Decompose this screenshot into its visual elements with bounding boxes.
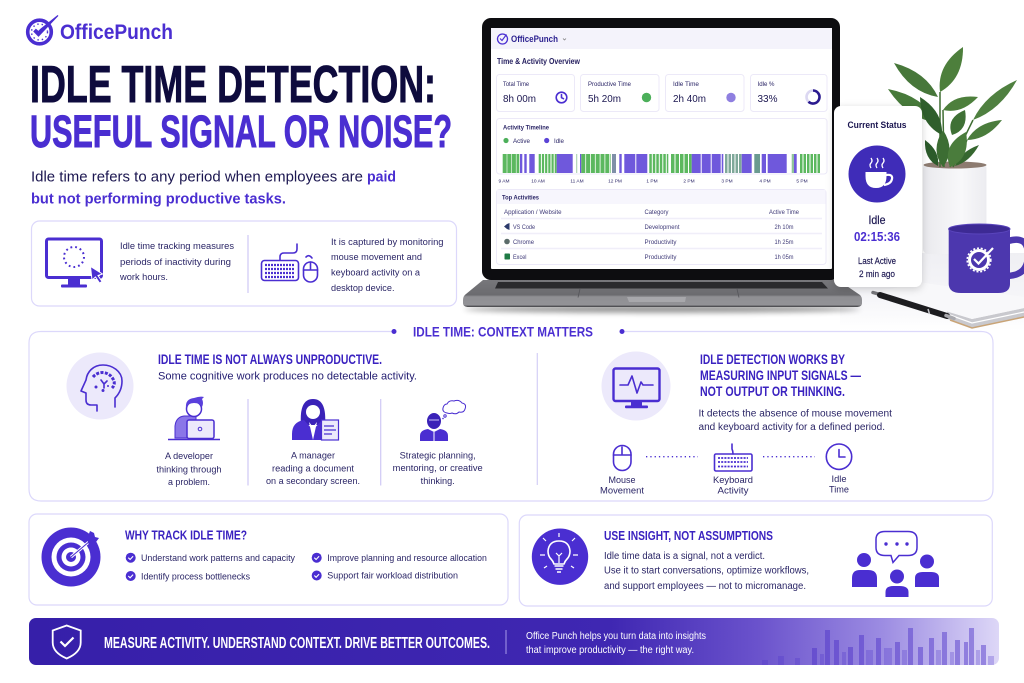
heading: not always unproductive: IDLE TIME IS NOT ALWAYS UNPRODUCTIVE.: [158, 352, 382, 367]
heading: input signals: MEASURING INPUT SIGNALS —: [700, 368, 861, 383]
flow labels: Time: [829, 484, 849, 494]
activity timeline: 9 AM: [499, 178, 509, 184]
icon: shield check: [53, 626, 81, 658]
banner: [29, 618, 999, 665]
activity timeline: Active: [513, 138, 530, 145]
logo: [28, 16, 173, 44]
flow labels: Idle: [832, 474, 847, 484]
activity timeline: 11 AM: [570, 178, 584, 184]
dashboard heading: Time & Activity Overview: [497, 57, 581, 66]
text: strategic: thinking.: [421, 476, 455, 486]
current status card: [834, 106, 922, 287]
activity timeline: 10 AM: [531, 178, 545, 184]
activity timeline: Activity Timeline: [503, 124, 549, 132]
stat card: productive time: 5h 20m: [588, 93, 621, 105]
top activities table: Excel: [513, 255, 526, 261]
plant: [888, 47, 1017, 254]
checklist: Support fair workload distribution: [327, 570, 458, 582]
heading: input signals: [700, 352, 861, 399]
activity timeline: 3 PM: [721, 178, 733, 184]
icon: mouse: [614, 446, 631, 470]
top activities table: Productivity: [644, 255, 676, 261]
banner note: [526, 631, 706, 656]
laptop shadow: [464, 306, 860, 312]
logo: OfficePunch: [60, 21, 173, 44]
banner note: that improve productivity — the right way.: [526, 645, 694, 656]
heading: why track: WHY TRACK IDLE TIME?: [125, 528, 247, 542]
stat card: idle percent: [750, 74, 827, 112]
coffee mug: [949, 224, 1024, 293]
text: capture: [331, 237, 444, 294]
stat card: idle percent: Idle %: [758, 81, 775, 88]
current status card: Current Status: [848, 120, 906, 130]
subheading: Some cognitive work produces no detectable activity.: [158, 370, 417, 382]
flow labels: Activity: [718, 486, 749, 496]
heading: use insight: USE INSIGHT, NOT ASSUMPTIONS: [604, 528, 773, 543]
current status card: Last Active: [858, 256, 896, 266]
text: developer: [156, 451, 222, 487]
icon: monitor with cursor: [46, 239, 102, 288]
text: signal not verdict: Use it to start conversations, optimize workflows,: [604, 566, 809, 576]
top activities table: Development: [644, 225, 680, 231]
heading: input signals: NOT OUTPUT OR THINKING.: [700, 384, 845, 399]
panel: why track idle time: [29, 514, 508, 605]
text: signal not verdict: Idle time data is a signal, not a verdict.: [604, 551, 765, 562]
title: USEFUL SIGNAL OR NOISE?: [30, 106, 452, 157]
laptop: [463, 18, 862, 307]
checklist: [126, 553, 487, 582]
stat card: total time: [496, 74, 574, 112]
intro text: Idle time refers to any period when employees are: [31, 170, 363, 186]
stat card: idle percent: 33%: [758, 93, 778, 105]
text: capture: mouse movement and: [331, 252, 422, 263]
icon: people conversation: [852, 532, 939, 597]
text: capture: It is captured by monitoring: [331, 237, 444, 248]
text: signal not verdict: [604, 551, 809, 592]
banner note: Office Punch helps you turn data into insights: [526, 631, 706, 642]
text: detects absence: [698, 408, 892, 433]
icon: strategic thinker: [420, 400, 466, 441]
top activities table: VS Code: [513, 225, 536, 231]
icon: target: [42, 528, 100, 586]
icon: developer: [168, 397, 220, 440]
icon: keyboard: [714, 444, 752, 471]
flow labels: [600, 474, 849, 496]
notebook and pen: [873, 283, 1024, 328]
dashboard logo: OfficePunch: [511, 34, 558, 44]
panel: context matters: [29, 324, 993, 501]
text: strategic: [393, 450, 483, 486]
icon: clock: [826, 444, 852, 469]
laptop bezel: [482, 18, 840, 280]
title: [30, 56, 452, 157]
activity timeline: 2 PM: [683, 178, 695, 184]
text: manager: [266, 450, 360, 486]
stat card: idle time: [666, 74, 744, 112]
text: tracking: Idle time tracking measures: [120, 241, 234, 252]
top activities table: 1h 05m: [774, 255, 794, 261]
activity timeline: 12 PM: [608, 178, 622, 184]
icon: idle coffee cup: [848, 146, 906, 202]
laptop base: [463, 280, 862, 307]
icon: head with gears: [66, 352, 134, 420]
stat card: productive time: [580, 74, 659, 112]
activity timeline: 1 PM: [646, 178, 658, 184]
text: capture: keyboard activity on a: [331, 268, 421, 278]
text: detects absence: It detects the absence of mouse movement: [698, 408, 892, 420]
desk surface: [840, 253, 1024, 331]
stat card: total time: Total Time: [503, 81, 529, 88]
text: tracking: work hours.: [119, 272, 168, 283]
text: tracking: periods of inactivity during: [120, 257, 231, 268]
stat card: total time: 8h 00m: [503, 93, 536, 105]
text: strategic: mentoring, or creative: [393, 463, 483, 473]
intro text: paid: [367, 170, 396, 186]
top activities table: Category: [644, 210, 668, 216]
flow labels: Mouse: [608, 475, 636, 485]
text: signal not verdict: and support employees — not to micromanage.: [604, 581, 806, 592]
top activities table: Top Activities: [502, 194, 539, 202]
stat card: idle time: 2h 40m: [673, 93, 706, 105]
text: developer: a problem.: [168, 477, 210, 487]
text: tracking: [119, 241, 234, 283]
section heading: IDLE TIME: CONTEXT MATTERS: [413, 324, 593, 340]
heading: input signals: IDLE DETECTION WORKS BY: [700, 352, 845, 367]
banner slogan: MEASURE ACTIVITY. UNDERSTAND CONTEXT. DRIVE BETTER OUTCOMES.: [104, 635, 490, 652]
stat card: productive time: Productive Time: [588, 81, 631, 88]
flow labels: Movement: [600, 486, 645, 496]
text: capture: desktop device.: [331, 283, 394, 294]
text: manager: A manager: [291, 450, 335, 460]
current status card: 02:15:36: [854, 229, 900, 244]
text: detects absence: and keyboard activity for a defined period.: [698, 422, 885, 433]
stat card: idle time: Idle Time: [673, 81, 699, 88]
top activities table: Chrome: [513, 240, 535, 246]
activity timeline: Idle: [554, 138, 564, 145]
intro text: [31, 170, 396, 208]
intro text: but not performing productive tasks.: [31, 192, 286, 208]
title: IDLE TIME DETECTION:: [30, 56, 436, 114]
dashboard screen: [491, 28, 832, 269]
text: manager: on a secondary screen.: [266, 476, 360, 486]
top activities table: 1h 25m: [774, 240, 794, 246]
current status card: 2 min ago: [859, 269, 895, 279]
flow labels: Keyboard: [713, 475, 753, 485]
activity timeline: 5 PM: [796, 178, 808, 184]
checklist: Improve planning and resource allocation: [327, 553, 487, 564]
text: developer: thinking through: [156, 464, 222, 474]
icon: manager: [292, 399, 338, 440]
icon: light bulb: [532, 528, 588, 585]
panel: what is idle tracking: [32, 221, 456, 306]
top activities table: 2h 10m: [774, 225, 794, 231]
flow: mouse to keyboard to idle: [600, 444, 852, 496]
checklist: Identify process bottlenecks: [141, 571, 250, 582]
text: developer: A developer: [165, 451, 213, 461]
current status card: Idle: [868, 213, 886, 227]
activity timeline: 4 PM: [759, 178, 771, 184]
text: strategic: Strategic planning,: [400, 450, 476, 460]
top activities table: Application / Website: [504, 210, 562, 216]
icon: keyboard and mouse: [262, 244, 318, 282]
top activities table: Productivity: [644, 240, 676, 246]
activity timeline: [496, 118, 827, 184]
top activities table: Active Time: [769, 210, 800, 216]
text: manager: reading a document: [272, 464, 355, 474]
panel: use insight: [519, 515, 992, 606]
checklist: Understand work patterns and capacity: [141, 553, 295, 564]
icon: monitor with pulse: [602, 352, 670, 420]
top activities table: [496, 190, 826, 264]
skyline: [762, 628, 994, 665]
